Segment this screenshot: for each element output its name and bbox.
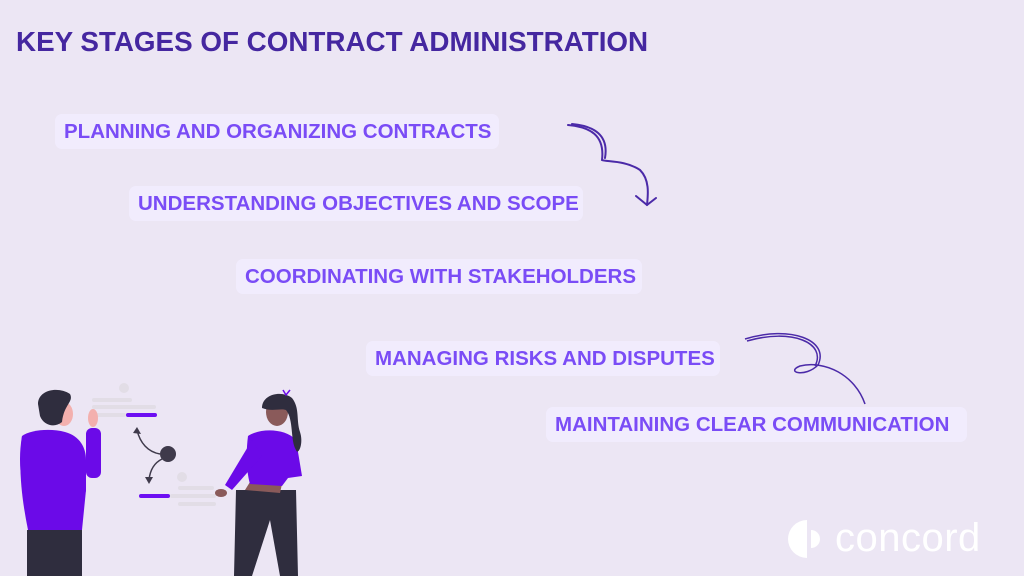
title: KEY STAGES OF CONTRACT ADMINISTRATION (16, 26, 648, 57)
logo: concord: concord (835, 516, 981, 560)
stage 2 pill (129, 186, 583, 221)
stage 4 pill: MANAGING RISKS AND DISPUTES (375, 347, 715, 370)
stage 3 pill: COORDINATING WITH STAKEHOLDERS (245, 265, 636, 288)
stage 1 pill: PLANNING AND ORGANIZING CONTRACTS (64, 120, 491, 143)
illustration: two people with diagram (20, 383, 302, 576)
arrow: loop swirl (745, 334, 865, 404)
stage 2 pill: UNDERSTANDING OBJECTIVES AND SCOPE (138, 192, 579, 215)
arrow: curly down arrow (568, 124, 656, 205)
stage 5 pill (546, 407, 967, 442)
woman (234, 490, 298, 576)
stage 3 pill (236, 259, 642, 294)
stage 4 pill (366, 341, 720, 376)
diagram (119, 383, 129, 393)
man (27, 530, 82, 576)
stage 1 pill (55, 114, 499, 149)
stage 5 pill: MAINTAINING CLEAR COMMUNICATION (555, 413, 949, 436)
